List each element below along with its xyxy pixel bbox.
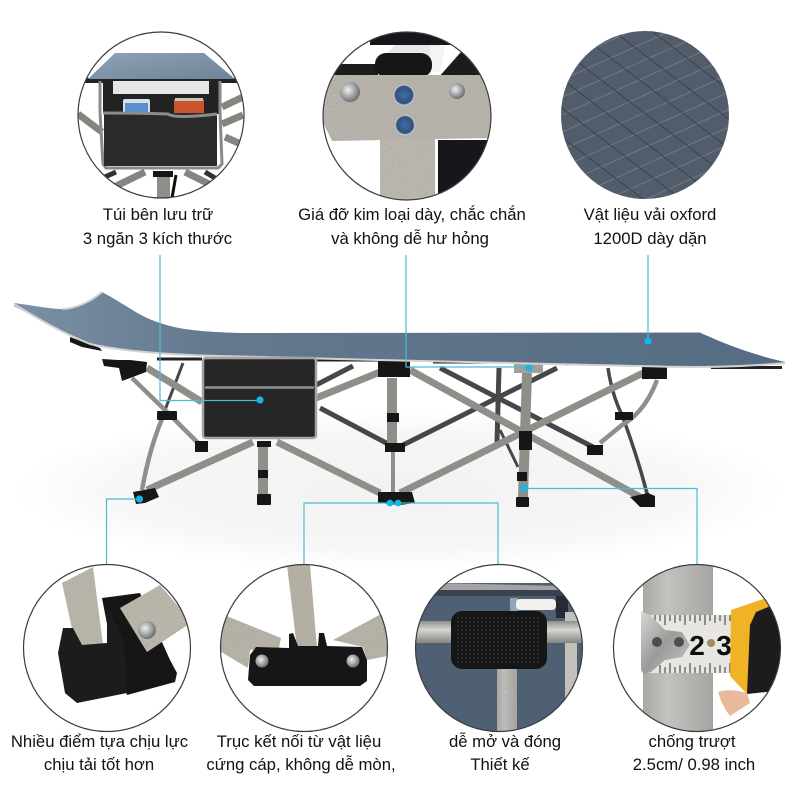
label: storage pocket: Túi bên lưu trữ	[103, 205, 213, 224]
label: connecting shaft	[206, 732, 396, 774]
tape measure numbers: 3	[716, 630, 732, 661]
callout line: fabric	[644, 255, 652, 345]
folding cot product	[14, 292, 785, 507]
label: easy open close	[449, 732, 561, 774]
cot frame back struts	[165, 363, 648, 497]
circle: metal bracket	[320, 30, 495, 205]
label: anti-slip size: 2.5cm/ 0.98 inch	[633, 755, 755, 774]
label: anti-slip size: chống trượt	[648, 732, 736, 751]
label: easy open close: Thiết kế	[470, 755, 530, 774]
cot feet and brackets	[70, 337, 782, 507]
label: support points	[11, 732, 188, 774]
label: support points: chịu tải tốt hơn	[44, 755, 154, 774]
label: metal bracket	[298, 205, 526, 248]
circle: tube diameter with tape measure	[614, 560, 785, 738]
circle: storage side pocket	[70, 30, 250, 200]
circle: oxford fabric texture	[561, 31, 729, 199]
circle: support foot	[24, 564, 192, 732]
circle: push button easy open and close	[414, 564, 584, 732]
label: metal bracket: Giá đỡ kim loại dày, chắc chắn	[298, 205, 526, 224]
tape measure numbers	[690, 636, 730, 656]
cot frame front tubes	[132, 368, 657, 497]
label: support points: Nhiều điểm tựa chịu lực	[11, 732, 188, 751]
label: storage pocket: 3 ngăn 3 kích thước	[83, 229, 232, 248]
side pocket on cot	[203, 358, 316, 438]
label: oxford fabric: Vật liệu vải oxford	[584, 205, 716, 224]
callout line: support feet	[106, 495, 143, 565]
label: anti-slip size	[633, 732, 755, 774]
fabric edge trim	[14, 292, 785, 367]
label: connecting shaft: cứng cáp, không dễ mòn,	[206, 755, 396, 774]
label: connecting shaft: Trục kết nối từ vật liệu	[217, 732, 381, 751]
label: oxford fabric	[584, 205, 716, 248]
callout line: storage pocket	[160, 255, 264, 404]
callout line: metal bracket	[406, 255, 533, 372]
label: oxford fabric: 1200D dày dặn	[593, 229, 707, 248]
tape measure numbers: 2	[689, 630, 705, 661]
circle: connecting shaft	[218, 564, 392, 732]
callout line: anti-slip tube size	[520, 484, 697, 565]
label: easy open close: dễ mở và đóng	[449, 732, 561, 751]
cot fabric bed	[14, 292, 785, 367]
label: storage pocket	[83, 205, 232, 248]
label: metal bracket: và không dễ hư hỏng	[331, 229, 489, 248]
callout line: connecting shaft and open-close design	[304, 500, 498, 565]
